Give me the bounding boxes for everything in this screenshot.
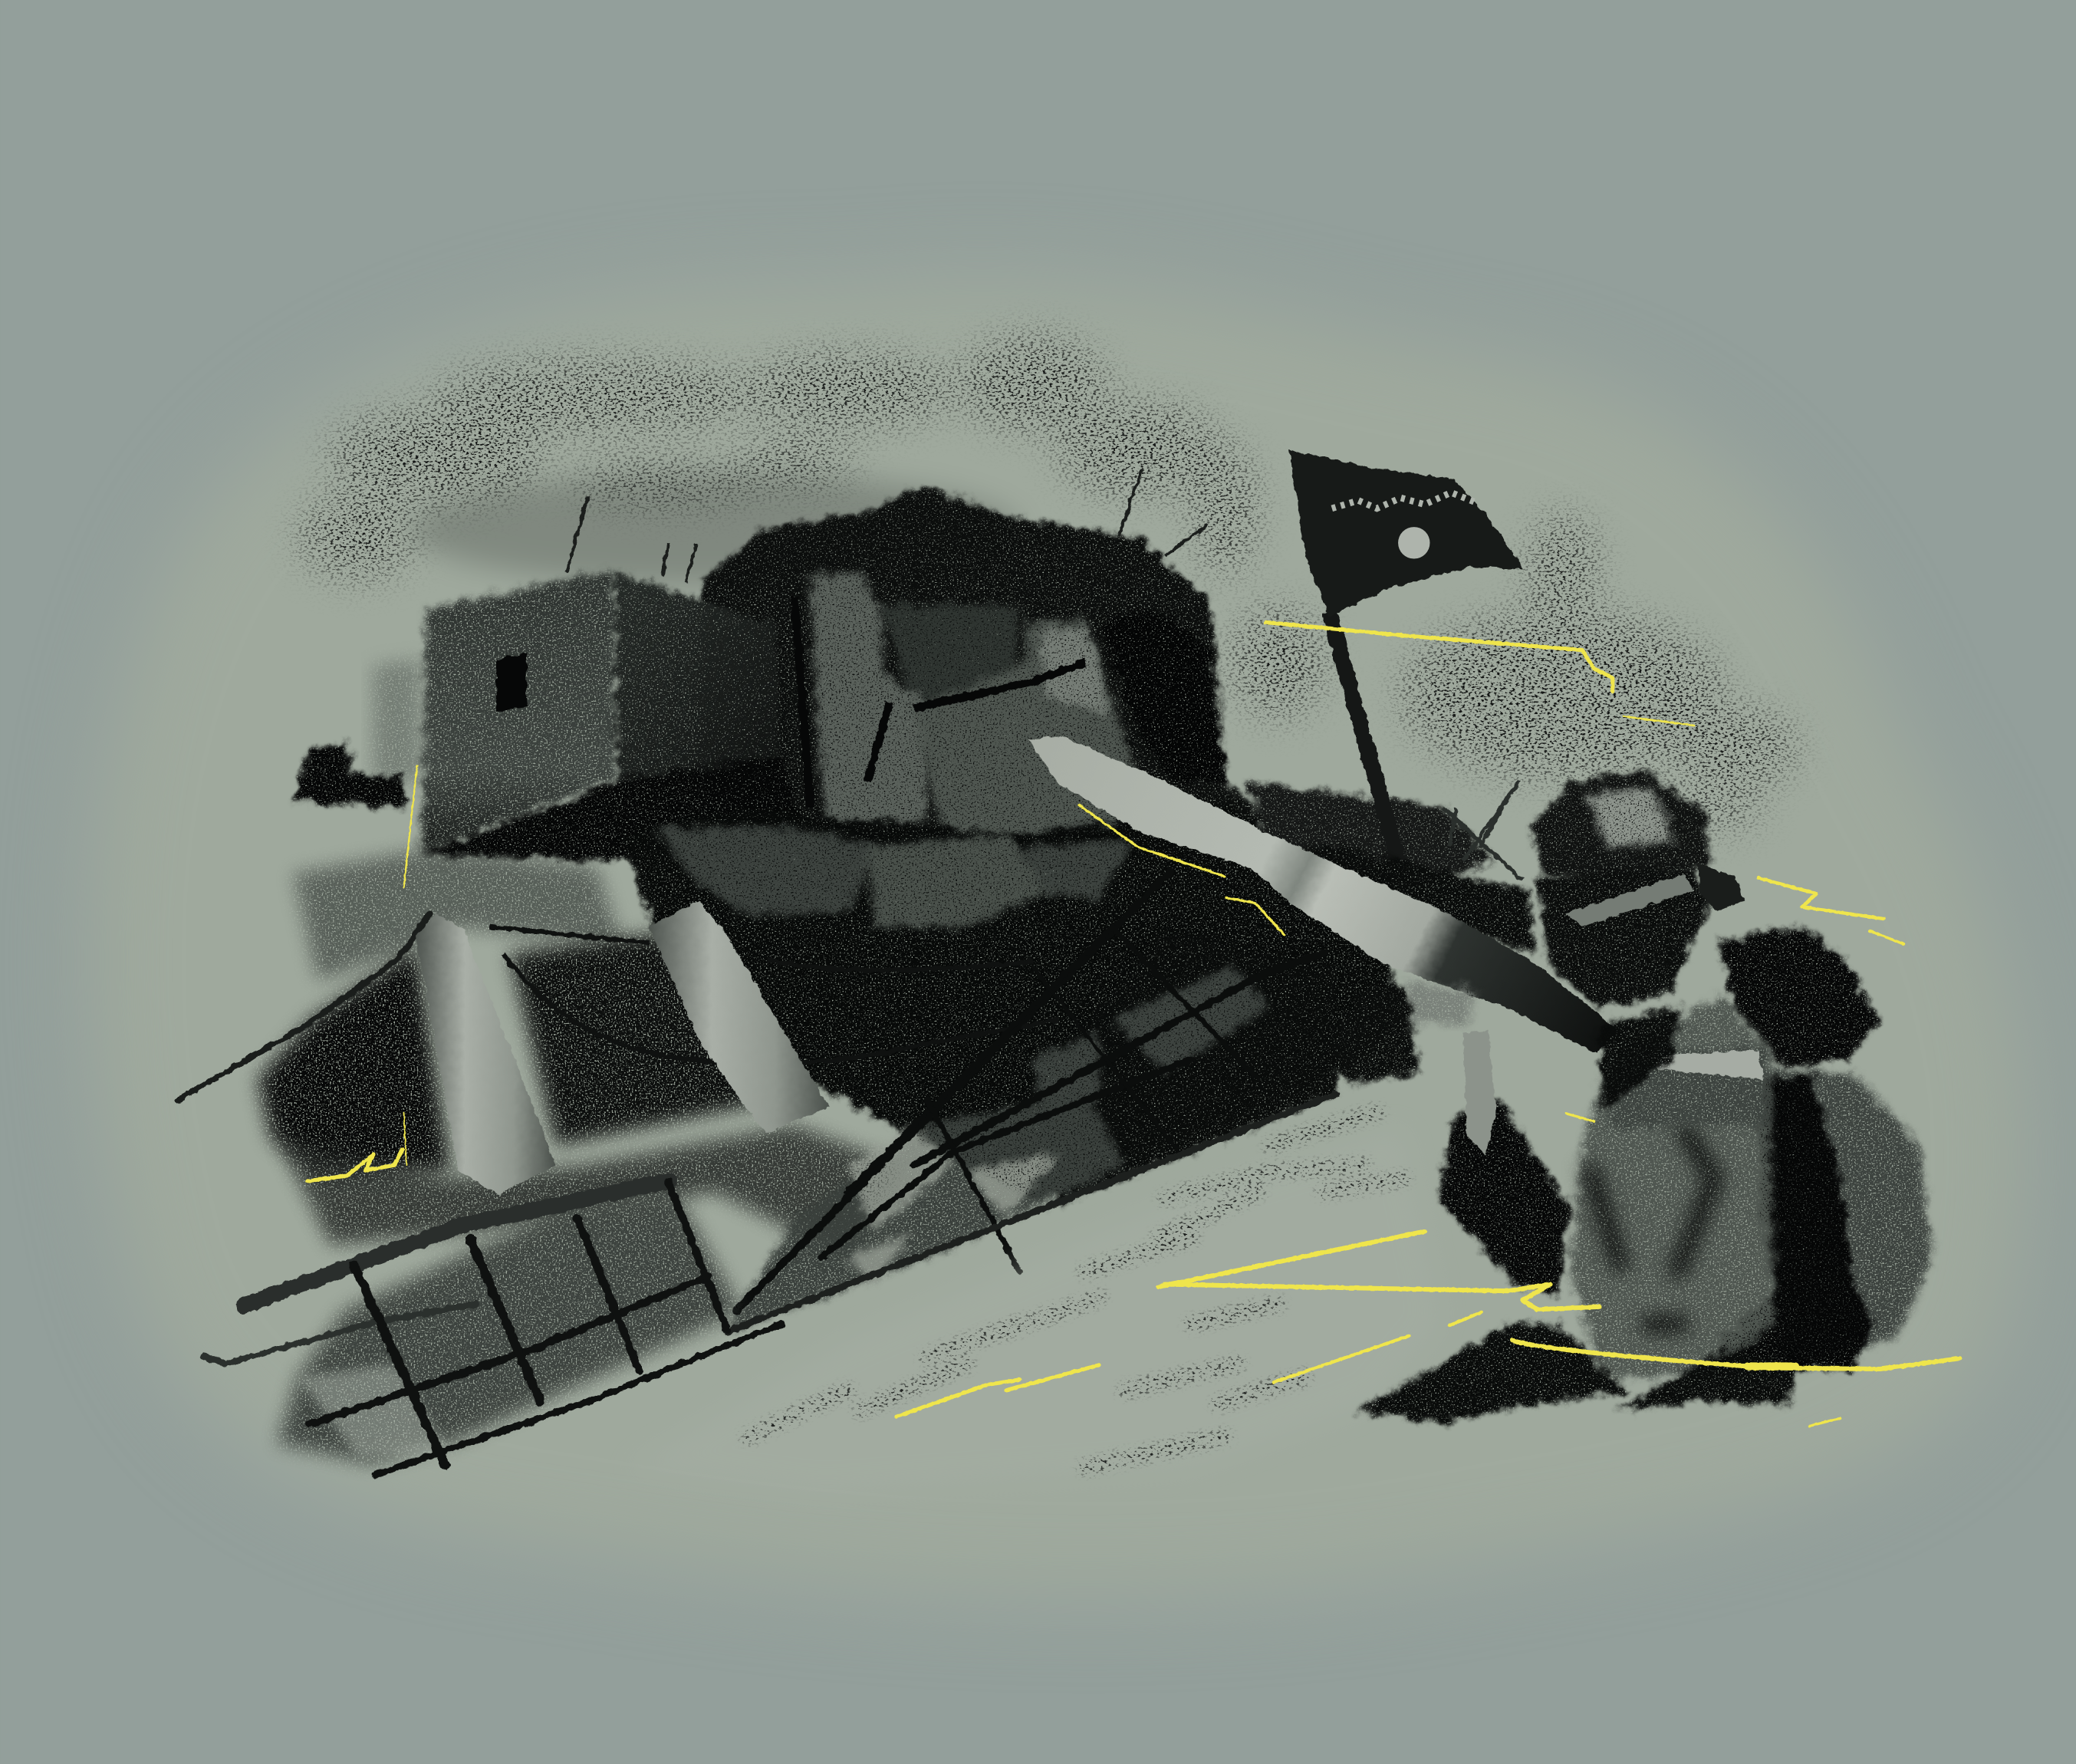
- rubble mound: [622, 782, 1496, 1198]
- knot: [1697, 864, 1745, 911]
- rocket launcher: [1028, 736, 1618, 1086]
- grainy fill behind fence: [278, 1192, 742, 1463]
- shoulder shadow: [1599, 1006, 1682, 1112]
- wreckage, dark upper right: [1019, 926, 1337, 1205]
- broken wall centre: [913, 620, 1139, 839]
- ruined structure: [567, 470, 1271, 861]
- house: [421, 571, 808, 861]
- ground shadow: [1356, 1324, 1801, 1423]
- post two: [649, 900, 829, 1134]
- wreckage, mottled lower left: [727, 1092, 1125, 1332]
- dark arch: [1101, 614, 1226, 782]
- fence: [204, 1181, 781, 1475]
- dark canopy: [702, 487, 1271, 861]
- yellow strokes: [308, 622, 1959, 1426]
- shadow mass over launcher: [1304, 847, 1536, 953]
- right hatching texture: [1232, 516, 1794, 826]
- rod: [177, 913, 430, 1101]
- left dark mass: [258, 933, 900, 1258]
- ropes: [490, 926, 1059, 1064]
- pale halo behind scene: [88, 275, 2028, 1599]
- sleeve: [1438, 1096, 1570, 1295]
- broken wall left: [811, 572, 929, 831]
- flag: [1290, 450, 1524, 617]
- first figure: [1438, 771, 1774, 1377]
- turban: [1529, 771, 1708, 880]
- pale gaps in wreckage: [847, 1125, 1059, 1285]
- ground highlights: [622, 1125, 1443, 1496]
- second figure: [1719, 926, 1933, 1371]
- flag pole: [1329, 612, 1398, 861]
- fence rails and bars: [204, 1181, 781, 1475]
- crack lines: [795, 596, 1086, 808]
- debris sticks near figure: [1443, 782, 1522, 880]
- face wrap: [1537, 867, 1710, 1009]
- robe: [1570, 996, 1774, 1377]
- wreckage, grey strokes: [1033, 966, 1271, 1125]
- smoke clouds: [302, 339, 1254, 585]
- post one: [416, 913, 556, 1194]
- distant buildings: [294, 660, 421, 808]
- debris beams: [727, 871, 1336, 1332]
- robe folds: [1589, 1125, 1715, 1324]
- protruding rods: [567, 470, 1207, 583]
- sash: [1609, 1046, 1772, 1128]
- forearm: [1463, 1030, 1496, 1154]
- ground speckle strokes: [748, 1112, 1403, 1467]
- pale patches in fence: [298, 1364, 450, 1456]
- sandy ground behind posts: [294, 847, 622, 979]
